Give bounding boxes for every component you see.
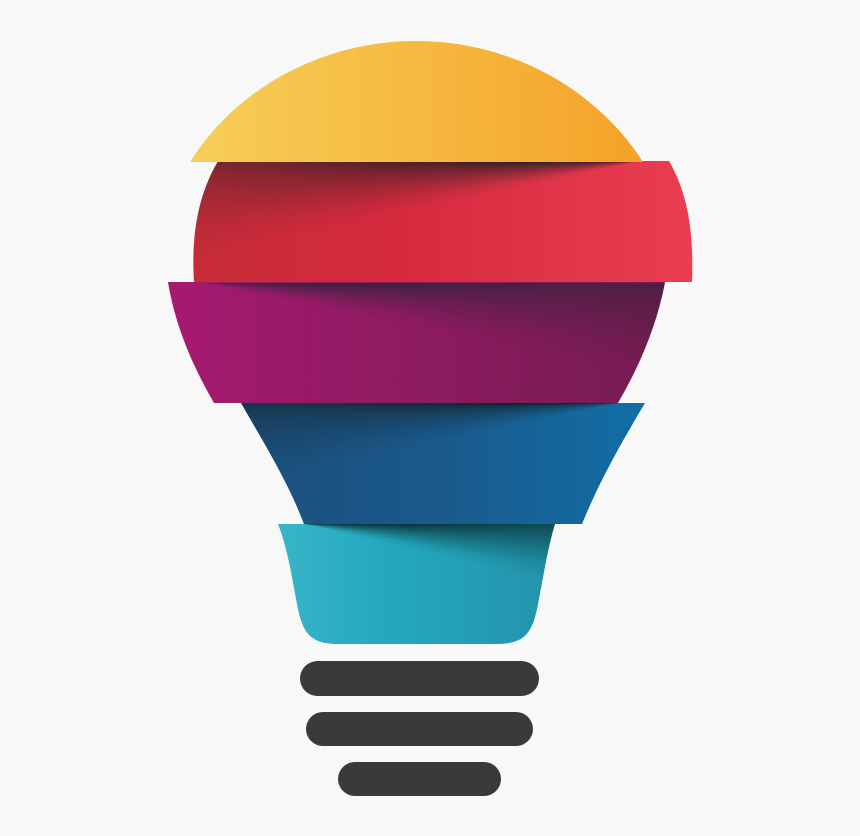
icon: base bar 3 [338, 762, 501, 796]
lightbulb infographic [168, 41, 692, 796]
icon: base bar 2 [306, 712, 533, 746]
panel: purple band [168, 282, 665, 403]
icon: base bar 1 [300, 661, 539, 696]
shadow on red band [195, 162, 636, 236]
shadow on cyan band [305, 524, 555, 570]
shadow on blue band [241, 403, 618, 454]
shadow on purple band [205, 283, 665, 342]
panel: yellow dome [190, 41, 643, 162]
panel: cyan band [278, 524, 555, 644]
panel: blue band [241, 403, 645, 524]
panel: red band [193, 161, 692, 282]
